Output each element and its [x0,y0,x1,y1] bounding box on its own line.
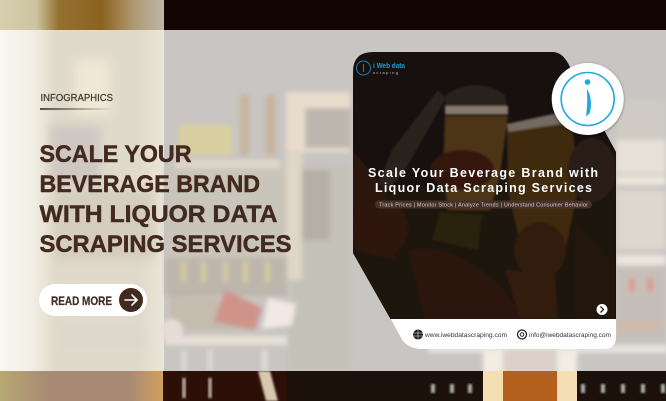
title: SCALE YOUR [40,141,192,168]
email contact: info@iwebdatascraping.com [529,332,611,339]
card footer band [390,319,616,349]
logo badge [552,63,624,135]
label: infographics: INFOGRAPHICS [40,92,113,104]
card logo small [356,61,405,75]
card subtitle pill: Track Prices | Monitor Stock | Analyze Trends | Understand Consumer Behavior [379,202,588,208]
card photo: toasting beer glasses [352,52,616,325]
card logo small: i Web data [373,63,405,70]
next arrow icon [596,304,608,315]
website contact: www.iwebdatascraping.com [424,332,507,339]
button: read more: READ MORE [51,296,112,308]
email contact [518,330,611,339]
panel: promo card [352,52,616,349]
title [40,141,292,258]
label: infographics [40,92,113,110]
background: blurred top strip of bar photo [0,0,666,30]
website contact [413,330,507,340]
background: blurred bottom strip of bar photo [0,371,666,401]
card heading: Scale Your Beverage Brand with [368,166,598,180]
title: SCRAPING SERVICES [40,231,292,258]
button: read more [39,284,147,316]
card heading [368,166,598,195]
title: BEVERAGE BRAND [40,171,260,198]
card logo small: scraping [373,70,399,75]
card heading: Liquor Data Scraping Services [375,181,592,195]
title: WITH LIQUOR DATA [40,201,278,228]
